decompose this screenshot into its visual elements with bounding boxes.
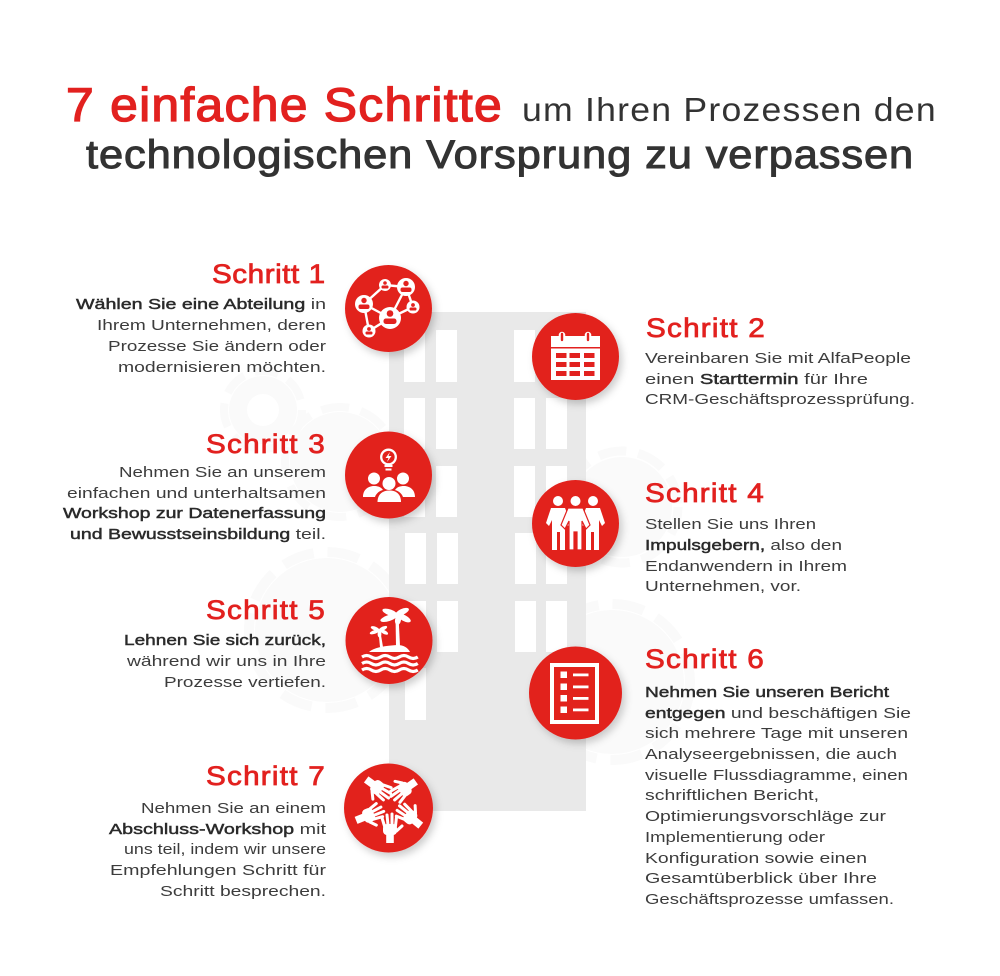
text: step 3: einfachen und unterhaltsamen <box>67 485 326 502</box>
heading: Schritt 4: Schritt 4 <box>645 478 764 508</box>
text: step 2: Vereinbaren Sie mit AlfaPeople <box>645 350 911 367</box>
text: step 1: Wählen Sie eine Abteilung in <box>76 296 326 313</box>
text: step 7: uns teil, indem wir unsere <box>124 841 326 858</box>
text: step 2: einen Starttermin für Ihre <box>645 371 868 388</box>
text: step 4: Unternehmen, vor. <box>645 578 801 595</box>
title: um Ihren Prozessen den <box>522 92 936 129</box>
text: step 4: Impulsgebern, also den <box>645 537 842 554</box>
panel: step 1 <box>76 259 326 376</box>
title: 7 einfache Schritte <box>66 79 502 132</box>
text: step 5: Lehnen Sie sich zurück, <box>124 632 326 649</box>
text: step 6: Geschäftsprozesse umfassen. <box>645 891 894 908</box>
text: step 3: und Bewusstseinsbildung teil. <box>70 526 326 543</box>
text: step 6: schriftlichen Bericht, <box>645 787 819 804</box>
text: step 7: Empfehlungen Schritt für <box>110 862 326 879</box>
panel: step 7 <box>109 761 327 900</box>
text: step 5: während wir uns in Ihre <box>126 653 326 670</box>
panel: step 4 <box>645 478 847 595</box>
panel: step 6 <box>645 644 911 908</box>
text: step 7 <box>109 800 327 900</box>
text: step 2 <box>645 350 915 408</box>
text: step 6: Konfiguration sowie einen <box>645 850 867 867</box>
title: technologischen Vorsprung zu verpassen <box>86 132 913 177</box>
icon: calendar <box>532 313 619 400</box>
text: step 3: Workshop zur Datenerfassung <box>63 505 326 522</box>
text: step 7: Schritt besprechen. <box>160 883 326 900</box>
text: step 1: modernisieren möchten. <box>118 359 326 376</box>
panel: step 3 <box>63 429 326 543</box>
heading: Schritt 2: Schritt 2 <box>646 313 765 343</box>
text: step 6: entgegen und beschäftigen Sie <box>645 705 911 722</box>
text: step 3 <box>63 464 326 543</box>
text: step 1: Prozesse Sie ändern oder <box>108 338 326 355</box>
text: step 4: Endanwendern in Ihrem <box>645 558 847 575</box>
panel: step 2 <box>645 313 915 408</box>
text: step 5: Prozesse vertiefen. <box>164 674 326 691</box>
text: step 3: Nehmen Sie an unserem <box>119 464 326 481</box>
background gears <box>224 371 690 760</box>
icon: people with light bulb <box>345 432 432 518</box>
text: step 6: visuelle Flussdiagramme, einen <box>645 767 908 784</box>
text: step 2: CRM-Geschäftsprozessprüfung. <box>645 391 915 408</box>
heading: Schritt 3: Schritt 3 <box>206 429 325 459</box>
icon: checklist document <box>529 646 622 740</box>
text: step 6: Gesamtüberblick über Ihre <box>645 870 877 887</box>
text: step 7: Abschluss-Workshop mit <box>109 821 327 838</box>
icon: palm island <box>346 597 432 684</box>
text: step 1: Ihrem Unternehmen, deren <box>97 317 326 334</box>
text: step 6: Implementierung oder <box>645 829 825 846</box>
text: step 5 <box>124 632 326 691</box>
heading: Schritt 7: Schritt 7 <box>206 761 325 791</box>
heading: Schritt 1: Schritt 1 <box>212 259 325 289</box>
text: step 1 <box>76 296 326 376</box>
text: step 6: Analyseergebnissen, die auch <box>645 746 897 763</box>
text: step 6: Nehmen Sie unseren Bericht <box>645 684 890 701</box>
text: step 6: sich mehrere Tage mit unseren <box>645 725 908 742</box>
icon: network <box>345 265 432 352</box>
text: step 4: Stellen Sie uns Ihren <box>645 516 816 533</box>
panel: step 5 <box>124 595 326 691</box>
title <box>66 79 936 177</box>
heading: Schritt 5: Schritt 5 <box>206 595 325 625</box>
text: step 6 <box>645 684 911 908</box>
text: step 7: Nehmen Sie an einem <box>141 800 326 817</box>
text: step 6: Optimierungsvorschläge zur <box>645 808 886 825</box>
text: step 4 <box>645 516 847 595</box>
building illustration <box>389 312 586 811</box>
heading: Schritt 6: Schritt 6 <box>645 644 764 674</box>
icon: three people <box>532 480 619 567</box>
icon: five joined hands <box>344 764 433 852</box>
